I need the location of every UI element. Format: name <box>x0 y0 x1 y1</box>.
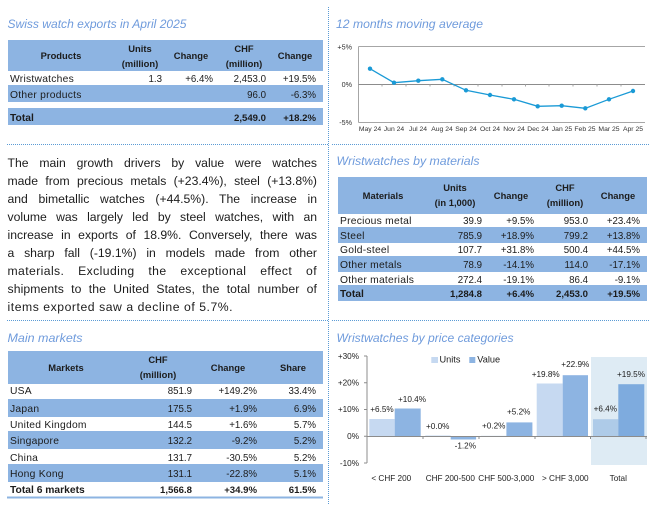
row: Other materials <box>340 275 640 286</box>
row: Total: 2,549.0 <box>234 113 266 124</box>
row: Other metals: -14.1% <box>503 260 534 271</box>
row: Steel <box>338 227 647 243</box>
table header: Products <box>41 50 81 61</box>
bar chart: +6.4% <box>594 404 617 413</box>
line chart: Jun 24 <box>384 126 404 133</box>
text block: main growth drivers <box>8 156 317 314</box>
row: Wristwatches: +6.4% <box>185 74 213 85</box>
line chart <box>337 42 645 133</box>
row: Precious metal: 953.0 <box>564 216 589 227</box>
legend: Value <box>477 354 500 364</box>
bar chart: +6.5% <box>370 405 394 414</box>
row: China: 5.2% <box>294 453 316 464</box>
heading: Swiss watch exports: Swiss watch exports in April 2025 <box>8 17 187 31</box>
row: Other materials: 272.4 <box>458 275 483 286</box>
table header: (million) <box>547 197 583 208</box>
row: Total: +6.4% <box>507 289 534 300</box>
text block: main growth drivers: volume was largely led by steel watches, with an <box>8 210 317 224</box>
row: United Kingdom: 5.7% <box>294 420 316 431</box>
row: Wristwatches: Wristwatches <box>10 74 74 85</box>
row: Hong Kong: Hong Kong <box>10 469 64 480</box>
row: China: 131.7 <box>168 453 192 464</box>
row: Steel: 785.9 <box>458 231 482 242</box>
line chart: 0% <box>342 80 353 89</box>
line chart: +5% <box>337 42 353 52</box>
row: USA: 33.4% <box>289 386 316 397</box>
line chart: Oct 24 <box>480 126 500 133</box>
line chart: Apr 25 <box>623 126 643 133</box>
row: Total <box>338 285 647 301</box>
heading: moving average: 12 months moving average <box>336 17 483 31</box>
row: Japan: Japan <box>10 404 39 415</box>
line chart: -5% <box>339 118 353 127</box>
text block: main growth drivers: The main growth drivers by value were watches <box>8 156 317 170</box>
row: China <box>10 453 316 464</box>
table header: Change <box>174 50 208 61</box>
row: Singapore: 132.2 <box>168 436 192 447</box>
row: Other metals: 78.9 <box>463 260 482 271</box>
panel: Wristwatches by materials <box>336 154 647 301</box>
row: Precious metal: +9.5% <box>506 216 534 227</box>
row: Singapore: -9.2% <box>232 436 257 447</box>
row: Total 6 markets <box>7 485 323 498</box>
row: Precious metal: +23.4% <box>607 216 640 227</box>
table header: Units <box>128 43 152 54</box>
bar chart: +5.2% <box>507 408 530 417</box>
legend <box>431 354 500 364</box>
row: Other products: Other products <box>10 90 82 101</box>
line chart: May 24 <box>359 126 381 133</box>
panel: 12 months moving average <box>336 17 645 133</box>
table header: CHF <box>234 43 254 54</box>
row: Total 6 markets: 61.5% <box>289 485 316 496</box>
table header: Change <box>601 190 635 201</box>
panel: Swiss watch exports table <box>8 17 323 125</box>
bar chart: +22.9% <box>561 360 589 369</box>
bar chart: +30% <box>338 352 359 361</box>
row: Total: 2,453.0 <box>556 289 588 300</box>
bar chart: +0.2% <box>482 421 505 430</box>
table header: Share <box>280 362 306 373</box>
text block: main growth drivers: a sharp fall (-19.1%) in models made from other <box>8 246 317 260</box>
row: Gold-steel: +44.5% <box>607 245 640 256</box>
row: Other materials: 86.4 <box>569 275 589 286</box>
row: Other materials: -19.1% <box>503 275 534 286</box>
row: China: -30.5% <box>226 453 257 464</box>
row: United Kingdom: United Kingdom <box>10 420 87 431</box>
table header: Materials <box>363 190 403 201</box>
row: Gold-steel <box>340 245 640 256</box>
table header: Change <box>278 50 312 61</box>
heading: Main markets: Main markets <box>8 331 82 345</box>
bar chart: +10% <box>338 405 359 414</box>
text block: main growth drivers: increase in exports of 18.9%. Conversely, there was <box>8 228 317 242</box>
bar chart: > CHF 3,000 <box>542 474 589 483</box>
table header: CHF <box>555 182 575 193</box>
row: Other products: 96.0 <box>247 90 267 101</box>
bar chart: +19.8% <box>532 370 560 379</box>
row: United Kingdom: 144.5 <box>168 420 192 431</box>
row: Japan: 6.9% <box>294 404 316 415</box>
row: Other metals <box>338 256 647 272</box>
row: Singapore <box>8 431 323 449</box>
table header: (million) <box>226 58 262 69</box>
bar chart: Total <box>610 474 627 483</box>
row: Total: +19.5% <box>607 289 640 300</box>
line chart: Nov 24 <box>503 126 525 133</box>
row: Total <box>8 108 323 125</box>
row: Other products <box>8 85 323 102</box>
table header: Units <box>443 182 467 193</box>
text block: main growth drivers: and bimetallic watches (+44.5%). The increase in <box>8 192 317 206</box>
text block: main growth drivers: materials. Excluding the exceptional effect of <box>8 264 317 278</box>
row: Hong Kong: 5.1% <box>294 469 316 480</box>
bar chart: CHF 200-500 <box>426 474 475 483</box>
row: Steel: +18.9% <box>501 231 534 242</box>
row: Wristwatches: 1.3 <box>149 74 162 85</box>
row: Japan: 175.5 <box>168 404 192 415</box>
line chart: Aug 24 <box>431 126 453 133</box>
row: USA: +149.2% <box>218 386 257 397</box>
table header: (in 1,000) <box>435 197 475 208</box>
row: Total: Total <box>10 113 34 124</box>
line chart: Dec 24 <box>527 126 549 133</box>
table header <box>338 177 647 214</box>
row: Total: Total <box>340 289 364 300</box>
row: Other materials: Other materials <box>340 275 414 286</box>
bar chart: +20% <box>338 378 359 388</box>
table header: (million) <box>140 369 176 380</box>
row: Total 6 markets: 1,566.8 <box>160 485 193 496</box>
row: Other metals: Other metals <box>340 260 402 271</box>
line chart: Sep 24 <box>455 126 477 133</box>
bar chart <box>338 352 647 483</box>
row: Japan: +1.9% <box>229 404 257 415</box>
row: USA: USA <box>10 386 32 397</box>
bar chart: 0% <box>347 432 359 441</box>
table header: Markets <box>48 362 84 373</box>
line chart: Feb 25 <box>574 126 596 133</box>
line chart: Mar 25 <box>598 126 620 133</box>
row: Singapore: Singapore <box>10 436 59 447</box>
row: Gold-steel: 107.7 <box>458 245 482 256</box>
panel: Wristwatches by price categories <box>336 331 647 483</box>
table header: (million) <box>122 58 158 69</box>
bar chart: +0.0% <box>426 422 449 431</box>
row: Steel: 799.2 <box>564 231 588 242</box>
line chart: Jul 24 <box>409 126 427 133</box>
row: Total: +18.2% <box>283 113 316 124</box>
row: Total 6 markets: +34.9% <box>224 485 257 496</box>
row: Other metals: -17.1% <box>609 260 640 271</box>
row: Total: 1,284.8 <box>450 289 483 300</box>
row: Wristwatches <box>10 74 316 85</box>
row: Precious metal: Precious metal <box>340 216 412 227</box>
row: Wristwatches: 2,453.0 <box>234 74 267 85</box>
row: Hong Kong: -22.8% <box>226 469 257 480</box>
bar chart: CHF 500-3,000 <box>478 474 535 483</box>
row: Other products: -6.3% <box>291 90 316 101</box>
row: Other materials: -9.1% <box>615 275 640 286</box>
panel: Main markets <box>7 331 323 498</box>
bar chart: -1.2% <box>455 442 476 450</box>
row: China: China <box>10 453 38 464</box>
text block: main growth drivers: shipments to the United States, the total number of <box>8 282 317 296</box>
row: United Kingdom <box>10 420 316 431</box>
heading: materials: Wristwatches by materials <box>336 154 480 168</box>
line chart: Jan 25 <box>552 126 572 133</box>
legend: Units <box>440 354 461 364</box>
row: Hong Kong <box>8 464 323 482</box>
table header: Change <box>494 190 528 201</box>
row: USA: 851.9 <box>168 386 192 397</box>
row: Precious metal <box>340 216 640 227</box>
row: USA <box>10 386 316 397</box>
bar chart: +10.4% <box>398 395 426 404</box>
row: Precious metal: 39.9 <box>463 216 482 227</box>
row: Gold-steel: Gold-steel <box>340 245 389 256</box>
table header <box>8 351 323 384</box>
row: Hong Kong: 131.1 <box>168 469 192 480</box>
text block: main growth drivers: items exported saw a decline of 5.7%. <box>8 300 233 314</box>
row: Japan <box>8 399 323 417</box>
table header: CHF <box>148 354 168 365</box>
text block: main growth drivers: made from precious metals (+23.4%), steel (+13.8%) <box>8 174 317 188</box>
bar chart: +19.5% <box>617 370 645 379</box>
heading: price categories: Wristwatches by price categories <box>336 331 514 345</box>
table header: Change <box>211 362 245 373</box>
row: Steel: Steel <box>340 231 365 242</box>
bar chart: -10% <box>340 459 359 468</box>
row: Total 6 markets: Total 6 markets <box>10 485 85 496</box>
row: United Kingdom: +1.6% <box>229 420 257 431</box>
row: Other metals: 114.0 <box>564 260 589 271</box>
bar chart: < CHF 200 <box>371 474 412 483</box>
row: Gold-steel: +31.8% <box>501 245 534 256</box>
table header <box>8 40 323 71</box>
row: Gold-steel: 500.4 <box>564 245 589 256</box>
row: Wristwatches: +19.5% <box>283 74 316 85</box>
row: Singapore: 5.2% <box>294 436 316 447</box>
row: Steel: +13.8% <box>607 231 640 242</box>
